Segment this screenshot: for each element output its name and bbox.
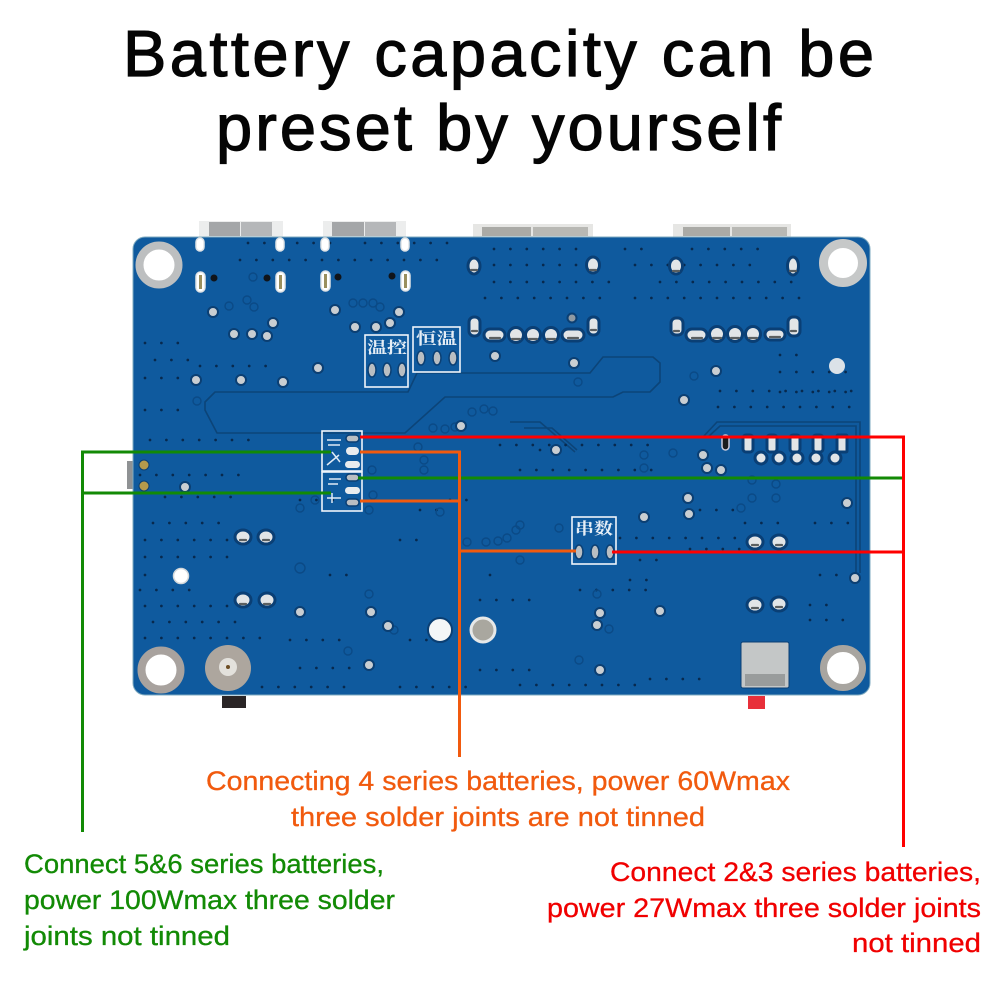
board body <box>133 237 870 695</box>
callout: 5&6 series batteries: power 100Wmax three solder <box>24 885 395 915</box>
silkscreen label: constant temperature <box>413 327 460 372</box>
callout: 5&6 series batteries <box>23 849 395 951</box>
copper trace outlines <box>205 357 860 573</box>
callout: 2&3 series batteries: power 27Wmax three solder joints <box>547 893 981 923</box>
mounting holes <box>140 244 862 691</box>
ring vias <box>193 273 780 664</box>
wires below board <box>222 696 765 709</box>
silver vias <box>139 305 860 675</box>
callout: 5&6 series batteries: joints not tinned <box>23 921 230 951</box>
silkscreen label: series count <box>572 517 616 564</box>
large square solder pad <box>741 642 789 688</box>
callout: 2&3 series batteries: Connect 2&3 series batteries, <box>610 857 981 887</box>
circuit board photo <box>127 221 870 709</box>
title <box>123 17 874 164</box>
small via dots <box>140 243 860 687</box>
silkscreen label: series count: 串数 <box>575 519 613 538</box>
large solder joints <box>235 257 847 642</box>
slotted pads <box>196 238 410 292</box>
green leader lines: 5&6 series <box>82 452 904 832</box>
title: preset by yourself <box>216 91 782 164</box>
title: Battery capacity can be <box>123 17 874 90</box>
silkscreen selector pads <box>322 431 362 511</box>
silkscreen label: constant temperature: 恒温 <box>416 329 457 348</box>
silkscreen label: temperature control <box>365 335 408 387</box>
callout: 2&3 series batteries: not tinned <box>852 928 981 958</box>
callout: 2&3 series batteries <box>547 857 981 958</box>
silkscreen label: temperature control: 温控 <box>367 338 407 357</box>
connectors on top edge <box>127 221 791 489</box>
callout: 4 series batteries: three solder joints are not tinned <box>291 802 705 832</box>
callout: 4 series batteries: Connecting 4 series batteries, power 60Wmax <box>206 766 791 796</box>
red leader lines: 2&3 series <box>360 437 904 847</box>
callout: 4 series batteries <box>206 766 791 832</box>
orange leader lines: 4 series <box>360 452 576 757</box>
callout: 5&6 series batteries: Connect 5&6 series batteries, <box>24 849 384 879</box>
